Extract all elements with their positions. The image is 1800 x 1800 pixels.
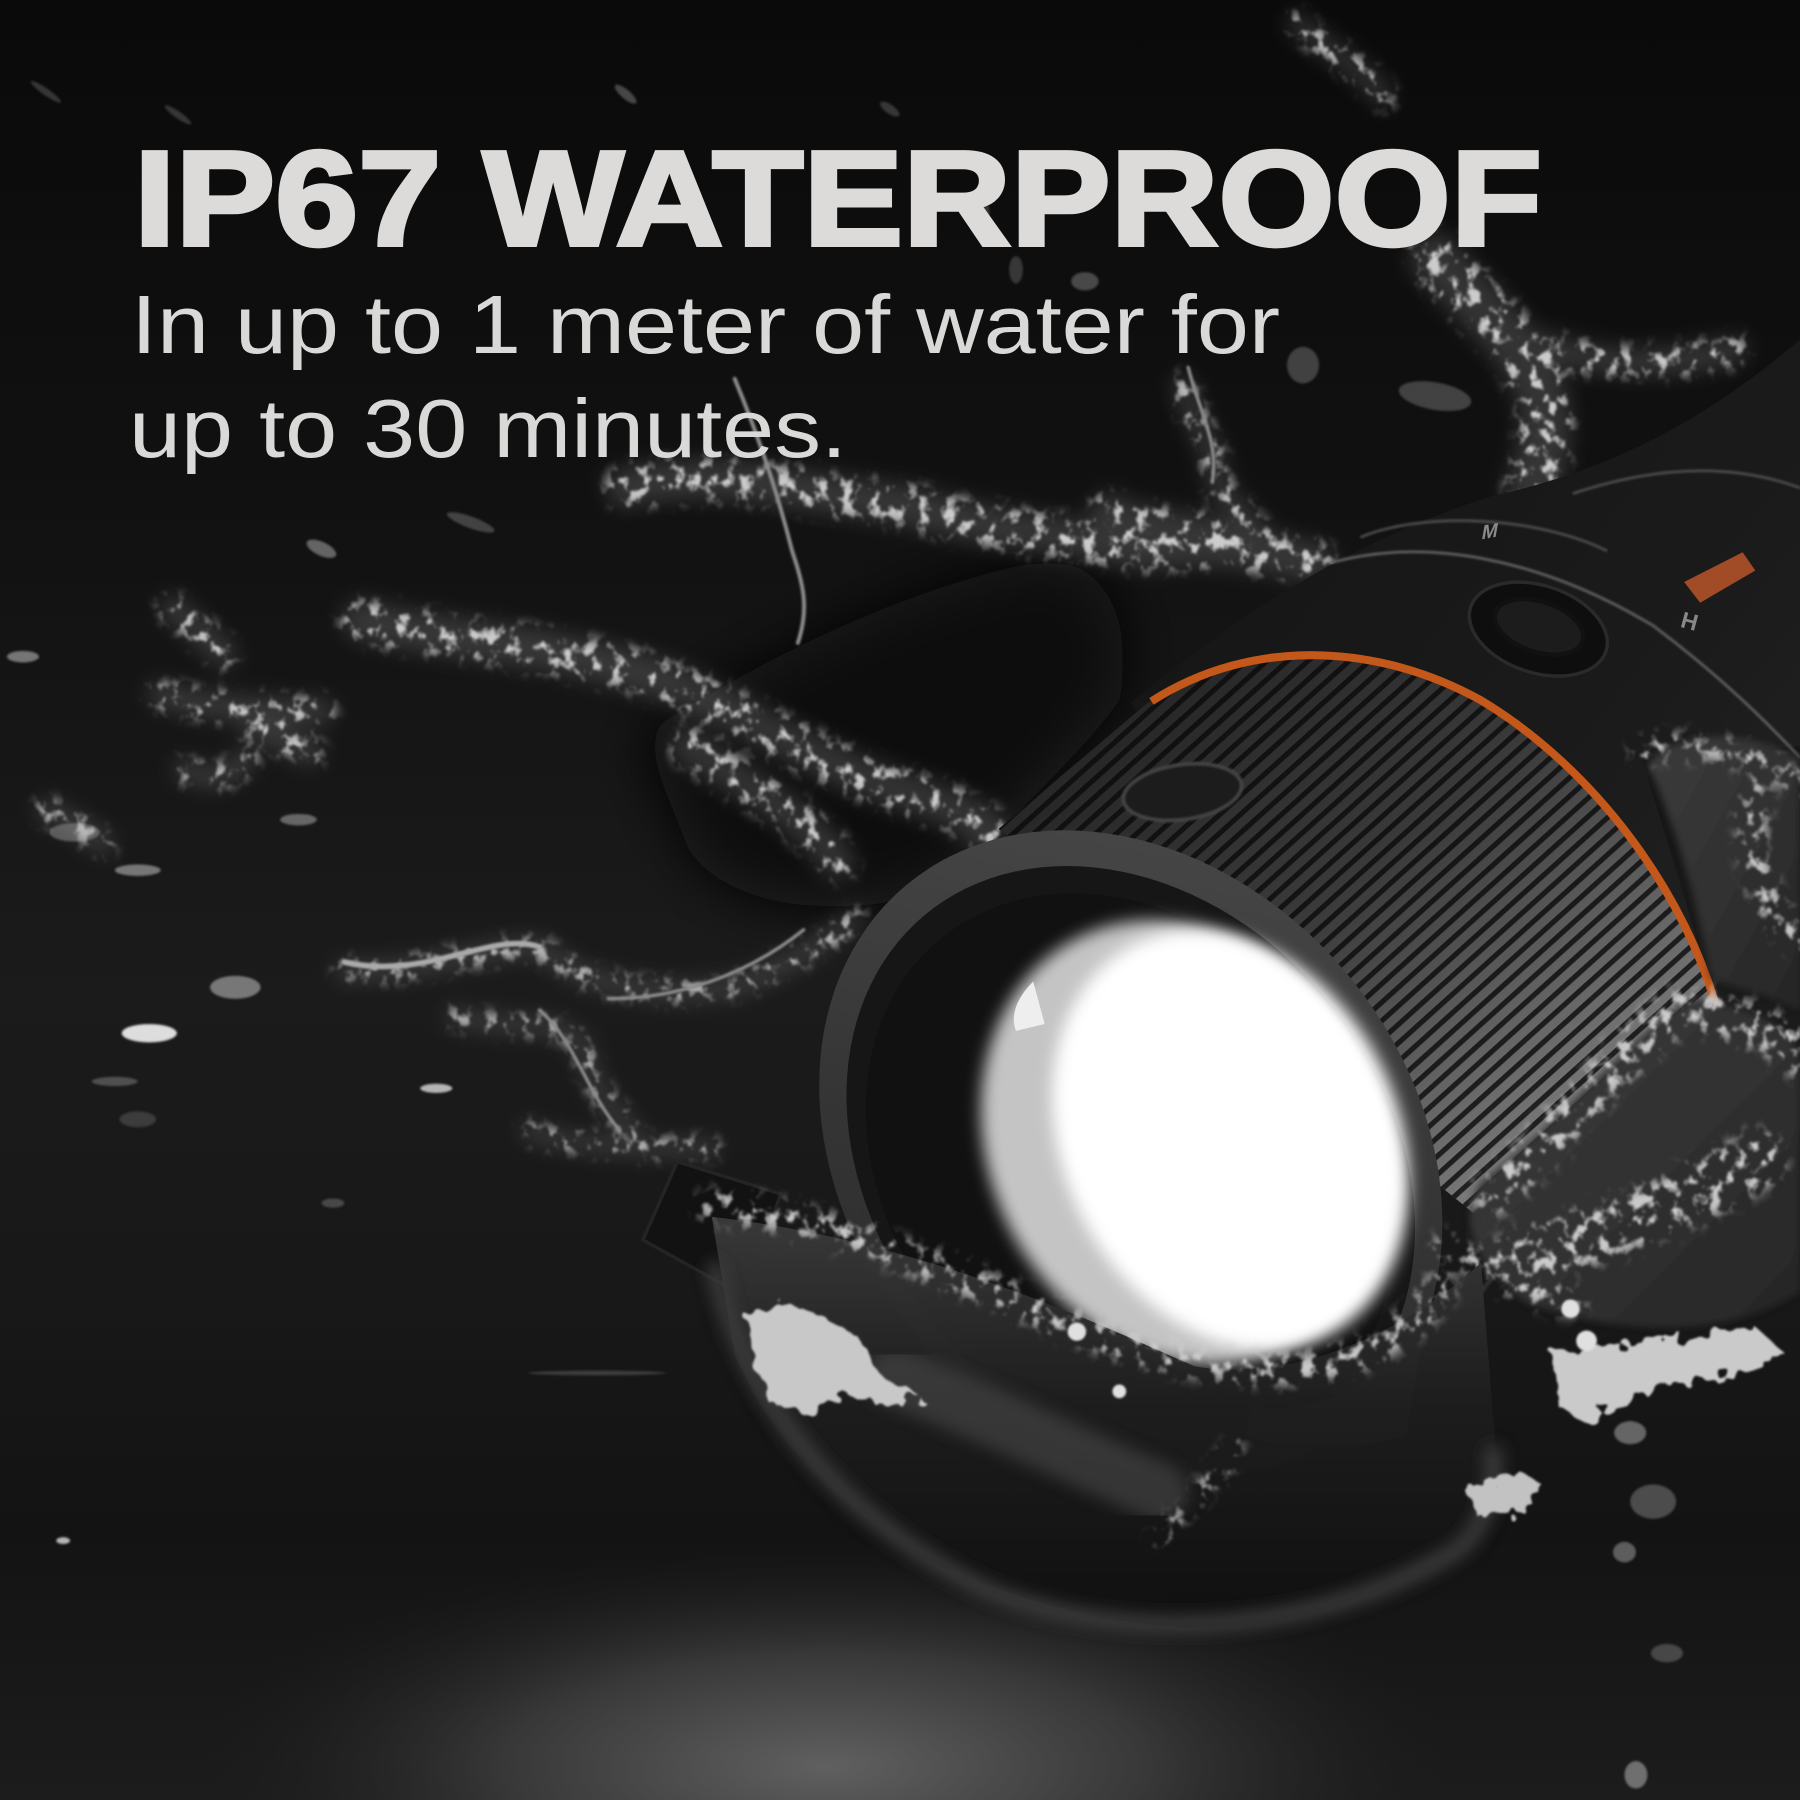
dome edge xyxy=(714,1263,1494,1624)
lamp glow xyxy=(984,870,1477,1409)
foam right xyxy=(1552,1326,1786,1424)
grip switch xyxy=(1119,757,1245,828)
dark water sheet behind the head xyxy=(643,561,1124,907)
orange ring xyxy=(1151,655,1719,1016)
dome body xyxy=(712,1217,1498,1627)
bezel inner ring xyxy=(729,752,1533,1572)
lower water mass xyxy=(1470,999,1800,1327)
lens glint xyxy=(1014,982,1045,1031)
water beads xyxy=(1068,1300,1597,1398)
right sparkle xyxy=(1446,746,1800,1303)
foam lower xyxy=(1467,1467,1541,1518)
mode indicator xyxy=(1684,552,1755,603)
ribbed grip xyxy=(998,659,1710,1213)
wet floor highlight xyxy=(115,1492,1607,1800)
strap / rear shadow xyxy=(643,1162,781,1297)
subtitle xyxy=(129,278,1280,475)
dome shimmer xyxy=(895,1378,1159,1492)
water dome over the head xyxy=(712,1205,1786,1627)
upper water mass xyxy=(1647,737,1800,1010)
right water masses xyxy=(1446,737,1800,1327)
flashlight xyxy=(641,340,1800,1370)
rear body xyxy=(1131,340,1800,1205)
subtitle line two: up to 30 minutes. xyxy=(129,382,847,475)
splash underlay xyxy=(46,23,1733,1148)
thin water threads xyxy=(344,367,1214,1131)
lower head shadow xyxy=(1246,1297,1429,1448)
foam left xyxy=(744,1303,918,1414)
mode label M: M xyxy=(1480,519,1500,545)
lens xyxy=(756,787,1506,1551)
body groove lines xyxy=(1332,471,1800,758)
title: IP67 WATERPROOF xyxy=(134,123,1542,274)
head bezel xyxy=(690,705,1571,1603)
splash streams xyxy=(46,23,1733,1148)
mode label H: H xyxy=(1678,607,1701,636)
dome sparkle xyxy=(712,1205,1441,1538)
power button xyxy=(1457,566,1619,693)
lens halo xyxy=(904,849,1461,1436)
subtitle line one: In up to 1 meter of water for xyxy=(131,278,1280,371)
